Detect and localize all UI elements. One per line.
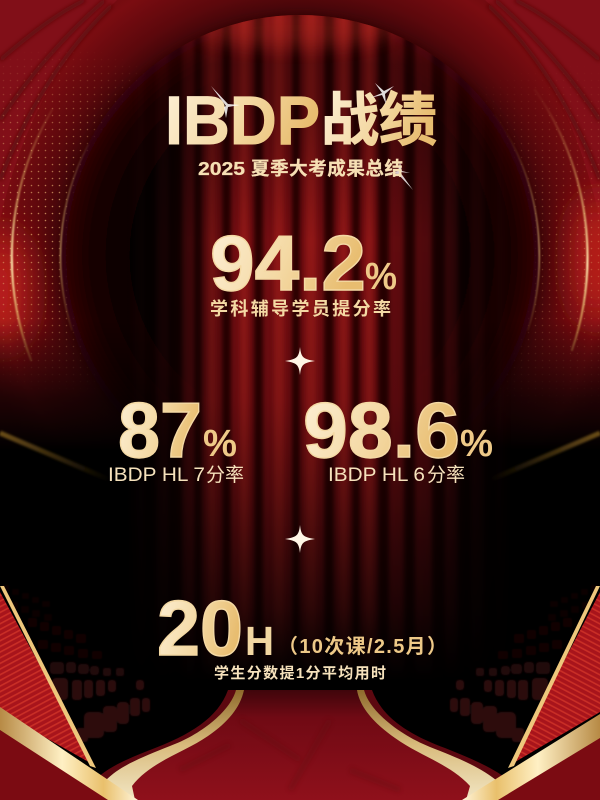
stat: 20H: 20 <box>157 584 243 672</box>
stat: 87% <box>108 386 244 486</box>
heading: IBDP战绩: 战绩 <box>321 88 437 153</box>
glow: right wall light <box>574 195 600 325</box>
fade of the walls to black <box>0 320 600 450</box>
label: HL 6 rate <box>328 464 465 486</box>
dark interior of arch <box>60 15 540 495</box>
stat: 98.6%: % <box>460 423 493 465</box>
icon: star divider top <box>285 347 315 375</box>
subheading: 夏季大考成果总结 <box>251 158 403 179</box>
stat: 98.6%: 98.6 <box>303 386 460 474</box>
stat: 94.2%: 94.2 <box>210 219 366 307</box>
panel: outer red drapes <box>0 0 600 460</box>
panel: auditorium seats right <box>450 585 598 742</box>
stat: 87%: 87 <box>118 386 202 474</box>
stat: 87%: % <box>203 423 237 465</box>
gold light lines left and right <box>0 433 600 480</box>
stat: 20H <box>157 584 447 682</box>
heading: IBDP战绩 <box>165 82 437 159</box>
decorative gold arcs <box>12 90 587 360</box>
label: average time per point: 学生分数提1分平均用时 <box>214 664 386 682</box>
subheading: 2025 <box>198 159 245 179</box>
label: tutoring improvement rate: 学科辅导学员提分率 <box>210 298 391 319</box>
label: HL 7 rate: 分率 <box>206 464 244 486</box>
panel: right corner drape <box>462 586 600 800</box>
label: HL 6 rate: IBDP HL 6 <box>328 465 425 486</box>
label: HL 6 rate: 分率 <box>427 464 465 486</box>
note: lesson count and months: （10次课/2.5月） <box>278 635 447 658</box>
panel: red carpet <box>90 690 515 800</box>
panel: left corner drape <box>0 586 138 800</box>
panel: dot fields on ring <box>2 59 600 375</box>
label: HL 7 rate <box>108 464 244 486</box>
stat: 20H: H <box>245 618 274 664</box>
icon: title sparkles <box>211 83 413 190</box>
label: HL 7 rate: IBDP HL 7 <box>108 465 205 486</box>
stat: 94.2%: % <box>365 256 397 298</box>
icon: star divider bottom <box>285 525 315 553</box>
panel: auditorium seats left <box>2 585 150 742</box>
heading: IBDP战绩: IBDP <box>165 82 320 159</box>
glow: left wall light <box>0 230 28 350</box>
panel: stage curtain <box>154 15 484 666</box>
